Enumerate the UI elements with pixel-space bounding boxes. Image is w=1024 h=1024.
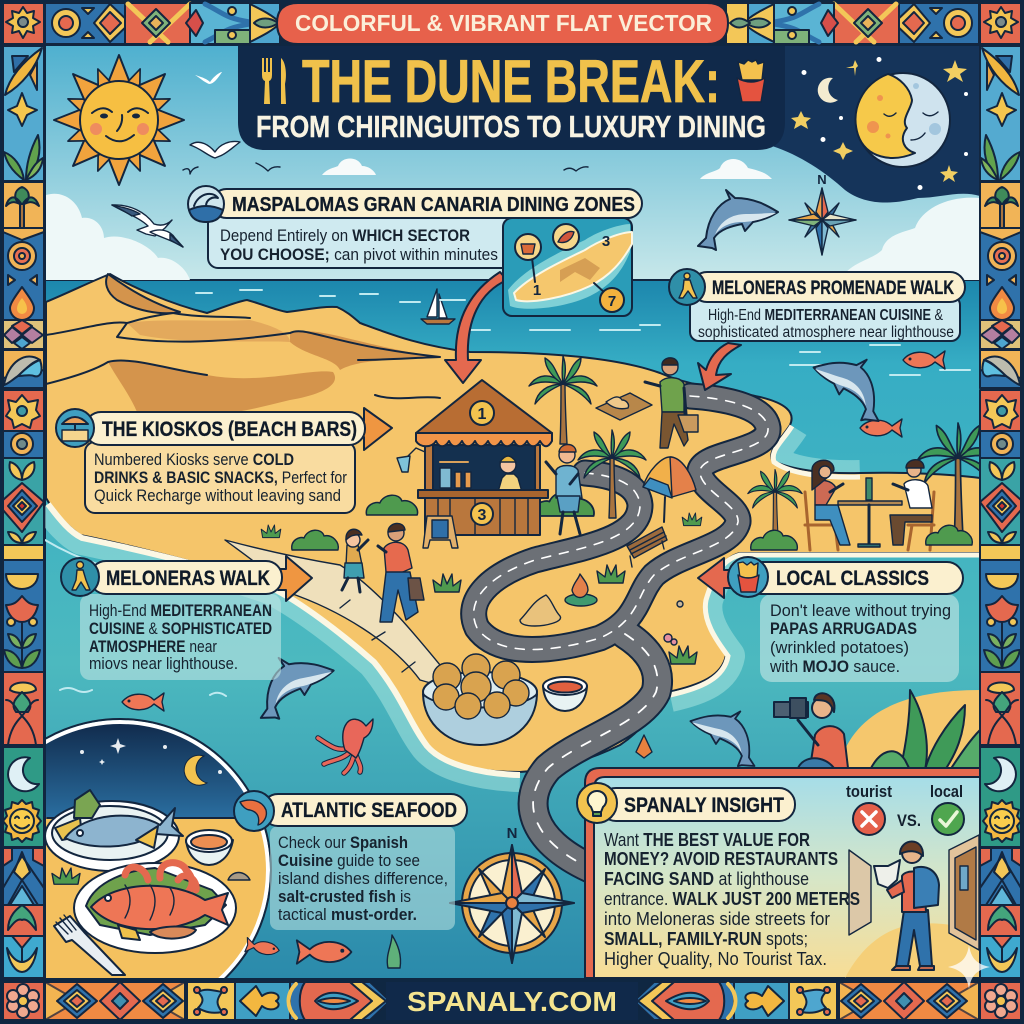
- icon: bulb: [577, 783, 617, 823]
- icon: beach bar: [56, 409, 94, 447]
- dune ridges: [46, 313, 440, 398]
- plate: blue fish: [45, 790, 183, 871]
- border: top right: [744, 3, 979, 44]
- body: local classics: Don't leave without trying: [770, 601, 951, 620]
- sailboat: [421, 289, 455, 324]
- heading: promenade: MELONERAS PROMENADE WALK: [712, 278, 954, 299]
- heading: insight: [600, 788, 795, 821]
- bowl of sauce: [186, 830, 233, 865]
- bush near kiosk: [366, 495, 418, 515]
- body: insight: FACING SAND at lighthouse: [604, 869, 809, 889]
- scene: sea: [46, 280, 980, 978]
- cloud: upper left: [46, 194, 190, 280]
- squid: [318, 719, 373, 773]
- cloud: small left: [322, 158, 376, 175]
- palm trees on beach: [529, 356, 999, 540]
- body: promenade: High-End MEDITERRANEAN CUISINE &: [708, 307, 944, 324]
- person: man with bag: [378, 523, 424, 622]
- border: footer right: [634, 982, 979, 1020]
- icon: fries: [737, 60, 765, 102]
- cloud: small right: [700, 159, 772, 179]
- icon: dolphin sky: [698, 190, 778, 250]
- body: seafood: island dishes difference,: [278, 869, 448, 888]
- bench: [627, 527, 667, 567]
- boardwalk: [225, 540, 462, 692]
- fork: [54, 915, 125, 975]
- body: insight: MONEY? AVOID RESTAURANTS: [604, 849, 838, 869]
- body: dining zones: YOU CHOOSE; can pivot within minutes: [220, 246, 498, 264]
- doors: [849, 835, 979, 950]
- label: vs: VS.: [897, 811, 921, 830]
- heading: dining zones: MASPALOMAS GRAN CANARIA DINING ZONES: [232, 194, 635, 216]
- heading: dining zones: [212, 189, 642, 218]
- heading: meloneras walk: MELONERAS WALK: [106, 567, 270, 590]
- icon: walker: [61, 558, 99, 596]
- shallow water around the beach: [48, 426, 860, 775]
- beach umbrella: [643, 457, 696, 522]
- kiosk: beach bar: 3: [478, 507, 487, 524]
- kiosk: beach bar: [416, 380, 552, 535]
- heading: kioskos: [85, 412, 365, 445]
- body: seafood: Check our Spanish: [278, 833, 408, 852]
- dune shadow: back dune: [106, 274, 180, 313]
- corner: bottom left: [3, 982, 44, 1020]
- border: footer left: [45, 982, 390, 1020]
- arrow: kioskos: [362, 408, 392, 450]
- arrow: meloneras walk: [278, 556, 312, 601]
- red arrow: zones to kiosk: [445, 272, 507, 383]
- person: girl: [342, 529, 368, 592]
- body: local classics: PAPAS ARRUGADAS: [770, 619, 917, 638]
- map inset: 3: [602, 233, 610, 250]
- body: insight: SMALL, FAMILY-RUN spots;: [604, 929, 808, 949]
- sandwich board: [423, 516, 458, 548]
- compass rose: large: [450, 825, 574, 963]
- cloud: upper right: [840, 198, 980, 280]
- arrow: local classics: [698, 558, 732, 598]
- body: seafood: salt-crusted fish is: [278, 887, 411, 906]
- panel: spanaly insight: [577, 768, 980, 978]
- icon: shrimp: [234, 791, 274, 831]
- panel: kioskos: [56, 408, 392, 513]
- kiosk: beach bar: 1: [478, 406, 487, 423]
- panel: atlantic seafood: [234, 791, 467, 930]
- body: kioskos: [85, 442, 355, 513]
- person: traveler reading map: [874, 842, 939, 970]
- icon: check: [932, 803, 964, 835]
- icon: walker: [669, 269, 705, 305]
- heading: local classics: LOCAL CLASSICS: [776, 567, 929, 590]
- body: insight: into Meloneras side streets for: [604, 909, 830, 929]
- heading: seafood: [262, 794, 467, 826]
- person: tourist in blue: [546, 444, 582, 534]
- heading: insight: SPANALY INSIGHT: [624, 794, 784, 817]
- heading: local classics: [745, 562, 963, 594]
- icon: sun: [54, 55, 184, 185]
- body: seafood: Cuisine guide to see: [278, 851, 420, 870]
- body: meloneras walk: [80, 594, 281, 680]
- icon: drink cup: [397, 448, 425, 472]
- fish and sea life: [122, 346, 945, 770]
- corner: top left: [3, 3, 44, 44]
- sea foam highlights: [45, 290, 970, 696]
- icon: moon: [791, 57, 968, 190]
- panel: promenade: [669, 269, 965, 341]
- dune shadow: front dune: [108, 361, 335, 412]
- panel: dining zones: [188, 186, 642, 316]
- panel: meloneras walk: [61, 556, 312, 680]
- bush near diners: [751, 525, 972, 550]
- person: man in green: [645, 358, 698, 448]
- sand floor: [845, 923, 979, 978]
- body: promenade: [690, 296, 960, 341]
- tropical plant: [870, 690, 980, 770]
- road network: [474, 396, 768, 868]
- compass rose: small: N: [817, 172, 827, 187]
- dune shadow: upper band: [127, 320, 290, 342]
- border: top left: [45, 3, 280, 44]
- icon: seagull: [112, 205, 183, 247]
- grass tufts: [261, 513, 702, 664]
- body: meloneras walk: CUISINE & SOPHISTICATED: [89, 620, 272, 638]
- body: meloneras walk: miovs near lighthouse.: [89, 655, 238, 673]
- heading: promenade: [692, 272, 965, 302]
- bowl of mojo sauce: [543, 677, 587, 711]
- icon: fries: [728, 557, 768, 597]
- fish below seafood: [245, 935, 401, 968]
- icon: wave: [188, 186, 224, 222]
- wet sand shore left: [48, 504, 520, 775]
- body: insight: entrance. WALK JUST 200 METERS: [604, 889, 860, 909]
- icon: fork and knife: [262, 58, 286, 104]
- label: local: local: [930, 783, 963, 801]
- corner: top right: [980, 3, 1021, 44]
- body: dining zones: [208, 210, 520, 268]
- body: dining zones: Depend Entirely on WHICH SECTOR: [220, 227, 470, 245]
- body: insight: Want THE BEST VALUE FOR: [604, 830, 810, 850]
- top banner: COLORFUL & VIBRANT FLAT VECTOR: [295, 10, 712, 36]
- scene: dining couple: [805, 460, 934, 550]
- body: local classics: with MOJO sauce.: [769, 657, 900, 676]
- pebble and grass: [52, 868, 250, 884]
- horizon line: [46, 279, 980, 281]
- corner: bottom right: [980, 982, 1021, 1020]
- scene: night sky: [760, 46, 980, 203]
- scene: dunes and main beach: [46, 274, 980, 772]
- body: seafood: [270, 826, 455, 930]
- title line 1: THE DUNE BREAK:: [302, 48, 720, 115]
- small buoy: [636, 735, 652, 758]
- icon: birds: [183, 72, 588, 174]
- body: meloneras walk: ATMOSPHERE near: [89, 638, 217, 656]
- heading: kioskos: THE KIOSKOS (BEACH BARS): [102, 418, 357, 441]
- towel with bird: [596, 393, 652, 420]
- scene: sky: [46, 46, 980, 282]
- border: top right patch: [726, 3, 750, 44]
- body: meloneras walk: High-End MEDITERRANEAN: [89, 602, 272, 620]
- heading: seafood: ATLANTIC SEAFOOD: [281, 799, 457, 822]
- bowl of papas arrugadas: [423, 654, 537, 745]
- panel: title: [238, 46, 785, 150]
- heading: meloneras walk: [90, 561, 282, 594]
- small flower and shell: [664, 601, 683, 645]
- photographer: [774, 690, 980, 770]
- sparkle: [948, 945, 990, 989]
- map inset: 7: [608, 293, 616, 310]
- body: seafood: tactical must-order.: [278, 905, 417, 924]
- compass rose: large: N: [507, 825, 517, 842]
- body: kioskos: DRINKS & BASIC SNACKS, Perfect for: [94, 469, 347, 487]
- horizon on vignette: [47, 817, 255, 819]
- border: left: [3, 46, 44, 978]
- label: tourist: tourist: [846, 783, 892, 801]
- body: kioskos: Quick Recharge without leaving sand: [94, 487, 341, 505]
- body: local classics: [760, 594, 959, 682]
- title line 2: FROM CHIRINGUITOS TO LUXURY DINING: [256, 109, 766, 144]
- plate: red fish and prawns: [74, 863, 236, 953]
- body: promenade: sophisticated atmosphere near lighthouse: [698, 324, 954, 341]
- dune shadow: middle dune: [290, 331, 440, 370]
- top banner: [277, 3, 728, 44]
- panel: seafood vignette: [46, 718, 272, 978]
- body: kioskos: Numbered Kiosks serve COLD: [94, 451, 294, 469]
- body: insight: Higher Quality, No Tourist Tax.: [604, 949, 827, 969]
- statue ornament: [565, 574, 597, 606]
- border: right: [980, 46, 1021, 978]
- footer brand: SPANALY.COM: [407, 986, 617, 1017]
- map inset: [503, 218, 632, 316]
- map inset: 1: [533, 282, 541, 299]
- compass rose: small: [789, 172, 856, 255]
- body: insight: [604, 830, 860, 969]
- footer brand: [386, 982, 638, 1020]
- shore right foam: [670, 426, 980, 695]
- panel: local classics: [698, 557, 963, 682]
- icon: cross: [853, 803, 885, 835]
- body: local classics: (wrinkled potatoes): [770, 638, 909, 657]
- bush by path: [292, 530, 338, 550]
- red arrow: promenade: [698, 343, 741, 390]
- sand sculpture: [520, 595, 561, 626]
- bush behind tourist: [533, 492, 594, 516]
